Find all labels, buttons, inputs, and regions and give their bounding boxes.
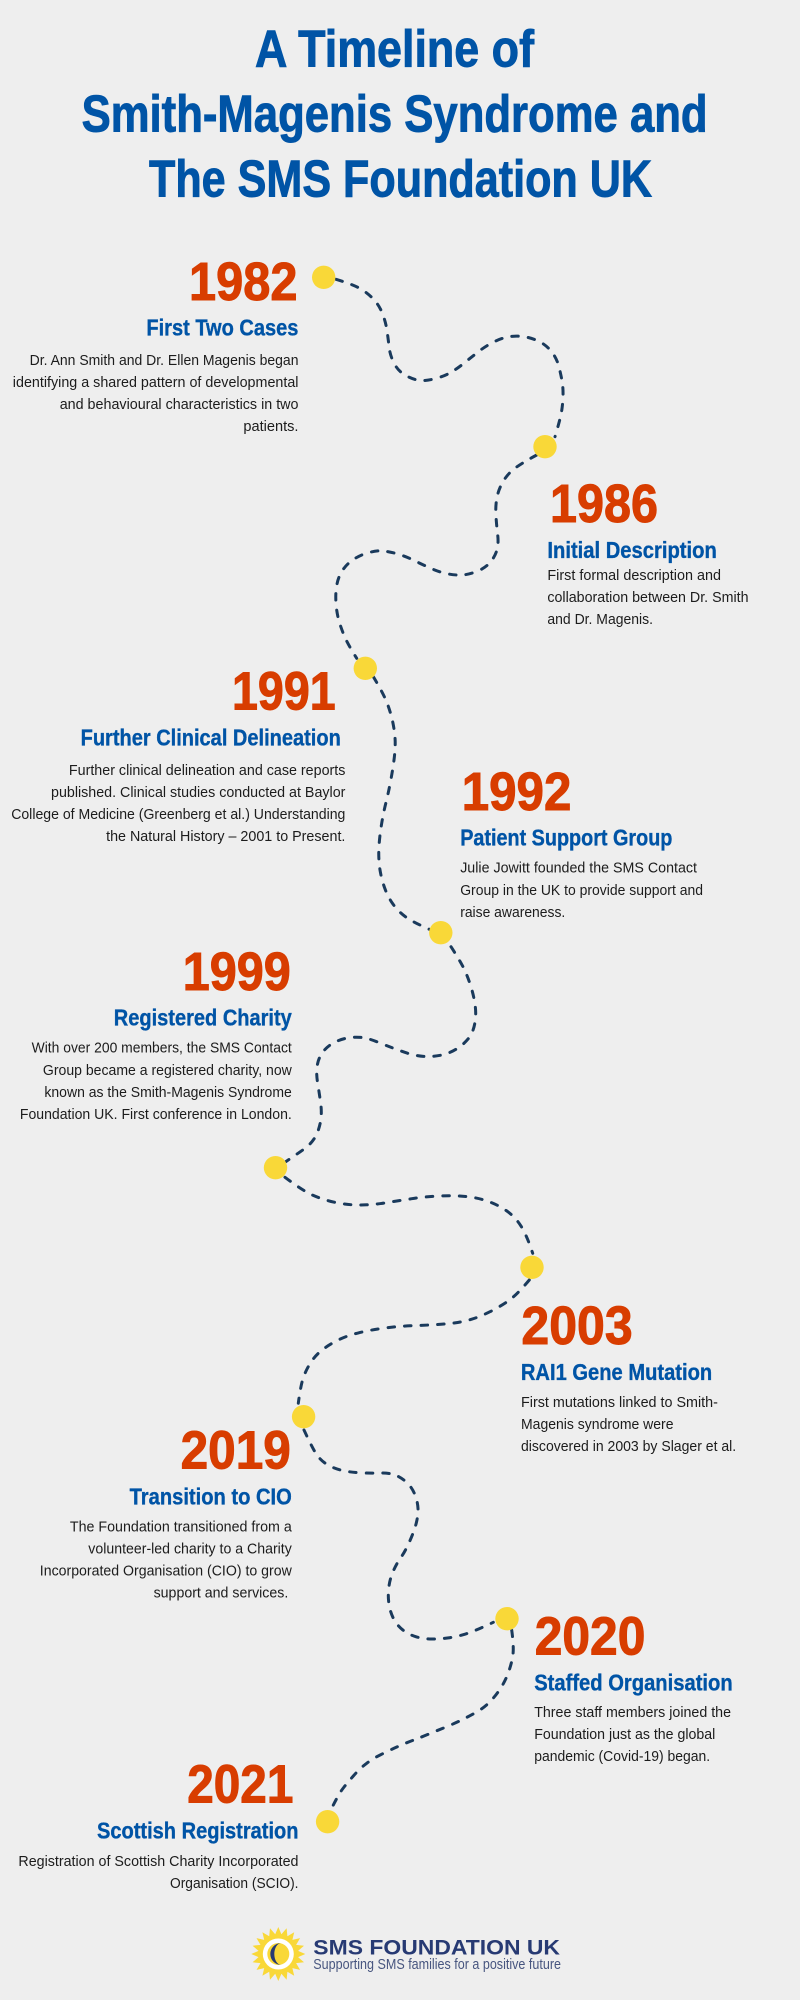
panel: 2003: discovered in 2003 by Slager et al. bbox=[521, 1438, 736, 1455]
panel: 2020: pandemic (Covid-19) began. bbox=[534, 1748, 710, 1765]
panel: 1992: 1992 bbox=[462, 762, 571, 822]
panel: 2020: Foundation just as the global bbox=[534, 1726, 715, 1743]
panel: 1982: and behavioural characteristics in two bbox=[60, 396, 299, 413]
panel: 1991: Further Clinical Delineation bbox=[81, 725, 341, 751]
panel: 1999: Group became a registered charity, now bbox=[43, 1062, 292, 1079]
panel: 1999 bbox=[20, 942, 293, 1123]
logo: SMS Foundation UK bbox=[251, 1927, 561, 1981]
panel: 2021: Scottish Registration bbox=[97, 1817, 298, 1843]
title: The SMS Foundation UK bbox=[149, 151, 652, 209]
title: A Timeline of bbox=[255, 21, 535, 79]
panel: 1999: known as the Smith-Magenis Syndrome bbox=[44, 1084, 292, 1101]
title bbox=[82, 21, 708, 209]
panel: 1986: Initial Description bbox=[547, 537, 717, 563]
panel: 1992: raise awareness. bbox=[460, 904, 565, 921]
panel: 2021: Registration of Scottish Charity Incorporated bbox=[18, 1853, 299, 1870]
panel: 2019: Incorporated Organisation (CIO) to grow bbox=[40, 1563, 292, 1580]
panel: 2019: Transition to CIO bbox=[130, 1484, 292, 1510]
panel: 2020: 2020 bbox=[535, 1607, 645, 1667]
panel: 1986: collaboration between Dr. Smith bbox=[547, 589, 748, 606]
panel: 1986: and Dr. Magenis. bbox=[547, 611, 653, 628]
panel: 1999: Registered Charity bbox=[114, 1004, 292, 1030]
panel: 1999: 1999 bbox=[183, 942, 291, 1002]
logo tagline: Supporting SMS families for a positive future bbox=[313, 1956, 561, 1973]
panel: 2019: 2019 bbox=[181, 1420, 291, 1480]
panel: 2019: volunteer-led charity to a Charity bbox=[88, 1541, 292, 1558]
panel: 2021: 2021 bbox=[187, 1754, 293, 1814]
panel: 1999: Foundation UK. First conference in London. bbox=[20, 1106, 292, 1123]
panel: 1982: First Two Cases bbox=[146, 315, 298, 341]
panel: 1999: With over 200 members, the SMS Contact bbox=[32, 1040, 293, 1057]
panel: 1991: the Natural History – 2001 to Present. bbox=[106, 828, 345, 845]
panel: 1992: Patient Support Group bbox=[460, 825, 672, 851]
panel: 2003: RAI1 Gene Mutation bbox=[521, 1359, 712, 1385]
panel: 1991: 1991 bbox=[232, 661, 336, 721]
panel: 1986: 1986 bbox=[550, 474, 658, 534]
panel: 2020: Three staff members joined the bbox=[534, 1704, 731, 1721]
panel: 2019: support and services. bbox=[154, 1585, 288, 1602]
panel: 1982: identifying a shared pattern of developmental bbox=[13, 374, 299, 391]
panel: 2021: Organisation (SCIO). bbox=[170, 1875, 298, 1892]
panel: 2019: The Foundation transitioned from a bbox=[70, 1519, 292, 1536]
panel: 1992 bbox=[460, 762, 703, 921]
icon: sun with crescent bbox=[251, 1927, 305, 1981]
panel: 2003 bbox=[521, 1296, 736, 1455]
panel: 1986 bbox=[547, 474, 748, 628]
panel: 2020: Staffed Organisation bbox=[534, 1670, 733, 1696]
panel: 2019 bbox=[40, 1420, 292, 1602]
panel: 1992: Group in the UK to provide support and bbox=[460, 882, 703, 899]
panel: 1982: Dr. Ann Smith and Dr. Ellen Magenis began bbox=[30, 352, 298, 369]
logo wordmark: SMS FOUNDATION UK bbox=[313, 1936, 560, 1959]
panel: 1992: Julie Jowitt founded the SMS Contact bbox=[460, 860, 698, 877]
panel: 2003: Magenis syndrome were bbox=[521, 1416, 674, 1433]
panel: 2021 bbox=[18, 1754, 299, 1892]
panel: 1982: 1982 bbox=[189, 252, 298, 312]
panel: 2003: 2003 bbox=[521, 1296, 633, 1356]
panel: 1982: patients. bbox=[243, 418, 298, 435]
timeline dots bbox=[264, 266, 557, 1833]
panel: 1991: College of Medicine (Greenberg et al.) Understanding bbox=[11, 806, 345, 823]
panel: 1991 bbox=[11, 661, 345, 845]
panel: 1986: First formal description and bbox=[547, 567, 721, 584]
panel: 2003: First mutations linked to Smith- bbox=[521, 1394, 718, 1411]
dashed timeline path bbox=[285, 279, 563, 1808]
panel: 1991: Further clinical delineation and case reports bbox=[69, 762, 345, 779]
panel: 1991: published. Clinical studies conducted at Baylor bbox=[51, 784, 345, 801]
panel: 2020 bbox=[534, 1607, 733, 1765]
panel: 1982 bbox=[13, 252, 299, 435]
